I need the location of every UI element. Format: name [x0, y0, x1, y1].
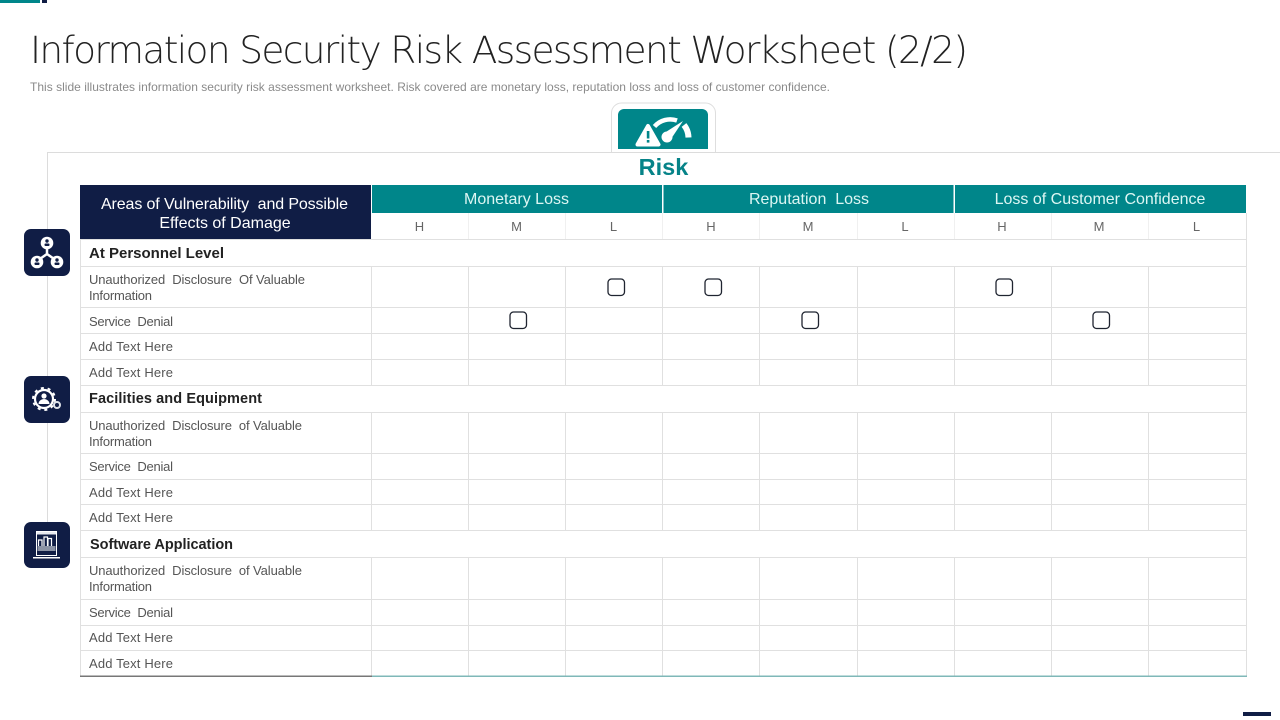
header: reputation loss: [664, 185, 954, 213]
section: facilities and equipment: Service Denial: [89, 459, 173, 474]
H M L sub headers: [415, 219, 1200, 234]
header: monetary loss: Monetary Loss: [464, 191, 569, 208]
section: software application: Information: [89, 579, 152, 594]
section: software application: [89, 537, 302, 671]
row and column grid: [80, 213, 1246, 676]
section: facilities and equipment: Facilities and Equipment: [89, 391, 262, 407]
section: software application: Add Text Here: [89, 630, 173, 645]
icon: gauge: [654, 119, 688, 142]
title: Information Security Risk Assessment Worksheet (2/2): [30, 28, 968, 72]
icon: gear with person: [24, 376, 70, 423]
bottom rule: [80, 676, 1247, 677]
section: at personnel level: Service Denial: [89, 314, 173, 329]
section: facilities and equipment: Add Text Here: [89, 510, 173, 525]
header: reputation loss: Reputation Loss: [749, 191, 869, 208]
H M L sub headers: M: [1094, 219, 1104, 234]
icon: warning triangle: [638, 126, 658, 144]
section: at personnel level: Add Text Here: [89, 339, 173, 354]
H M L sub headers: H: [415, 219, 424, 234]
header: loss of customer confidence: [955, 185, 1246, 213]
checkboxes: [510, 279, 1110, 328]
top accent bars: [0, 0, 47, 3]
H M L sub headers: L: [901, 219, 909, 234]
header: loss of customer confidence: Loss of Customer Confidence: [995, 191, 1205, 208]
H M L sub headers: M: [803, 219, 813, 234]
outer frame lines: [48, 152, 1280, 522]
H M L sub headers: L: [610, 219, 617, 234]
section: at personnel level: Unauthorized Disclosure Of Valuable: [89, 272, 305, 287]
section: at personnel level: [89, 245, 305, 380]
section: facilities and equipment: [89, 391, 302, 525]
section: at personnel level: At Personnel Level: [89, 245, 224, 262]
section: software application: Software Application: [90, 537, 233, 553]
icon: people network: [24, 229, 70, 276]
subtitle: This slide illustrates information security risk assessment worksheet. Risk covered are monetary loss, reputation loss and loss of customer confidence.: [30, 80, 830, 94]
section: facilities and equipment: Add Text Here: [89, 485, 173, 500]
H M L sub headers: H: [706, 219, 716, 234]
section: software application: Service Denial: [89, 605, 173, 620]
section: facilities and equipment: Information: [89, 434, 152, 449]
section: at personnel level: Information: [89, 288, 152, 303]
footer accent bar: [1243, 712, 1271, 716]
icon: software dashboard: [24, 522, 70, 568]
section: at personnel level: Add Text Here: [89, 365, 173, 380]
H M L sub headers: M: [511, 219, 522, 234]
section: facilities and equipment: Unauthorized Disclosure of Valuable: [89, 418, 302, 433]
section: software application: Add Text Here: [89, 656, 173, 671]
section: software application: Unauthorized Disclosure of Valuable: [89, 563, 302, 578]
header: areas of vulnerability: Areas of Vulnerability and Possible: [101, 196, 348, 213]
header: monetary loss: [372, 185, 662, 213]
risk heading: Risk: [639, 154, 689, 180]
H M L sub headers: L: [1193, 219, 1200, 234]
header: areas of vulnerability: Effects of Damage: [159, 215, 291, 232]
header: areas of vulnerability: [80, 185, 371, 239]
risk icon tab: [612, 103, 716, 152]
H M L sub headers: H: [997, 219, 1007, 234]
table: [80, 185, 1247, 677]
